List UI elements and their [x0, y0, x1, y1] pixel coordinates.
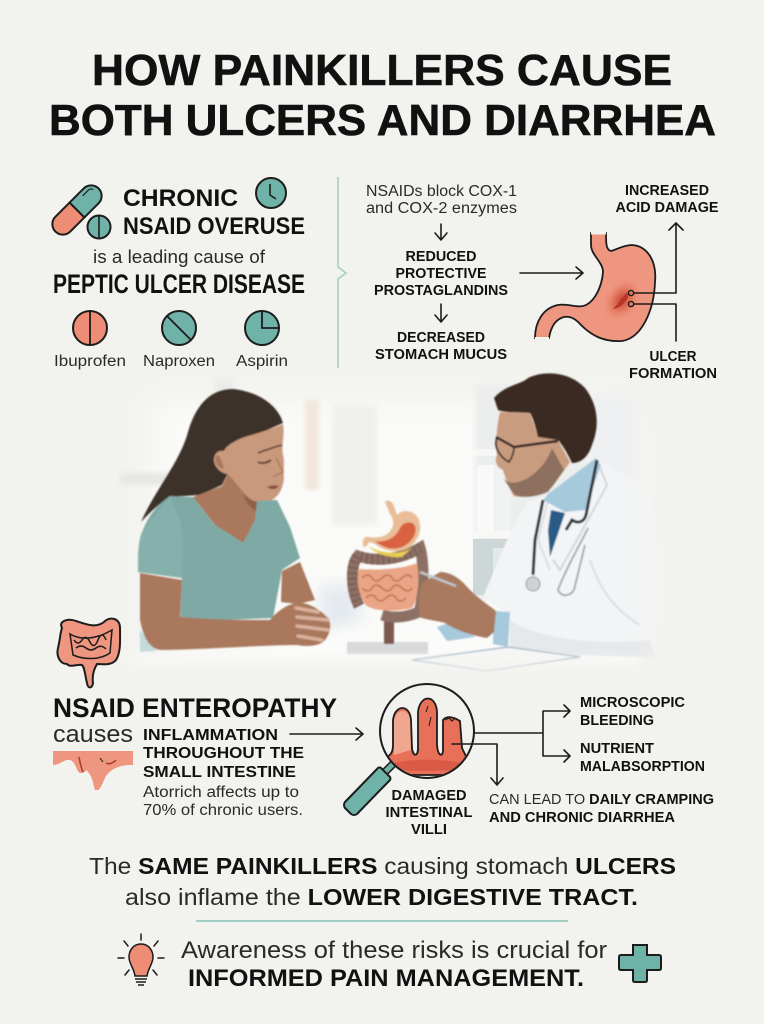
closing text: Awareness of these risks is crucial for	[181, 937, 607, 964]
connector: ulcer formation	[628, 301, 676, 341]
drug: naproxen	[143, 311, 215, 370]
text: inflammation throughout the small intestine: SMALL INTESTINE	[143, 764, 296, 781]
text: reduced protective prostaglandins	[374, 249, 508, 299]
table	[130, 620, 640, 672]
label: ulcer formation: FORMATION	[629, 366, 717, 382]
text: NSAIDs block enzymes: and COX-2 enzymes	[366, 200, 517, 217]
text: can lead to cramping and diarrhea: CAN LEAD TO DAILY CRAMPING	[489, 792, 714, 808]
label: microscopic bleeding	[580, 695, 686, 729]
text: causes: causes	[53, 721, 133, 748]
text: can lead to cramping and diarrhea	[489, 792, 714, 826]
summary text: The SAME PAINKILLERS causing stomach ULCERS	[89, 853, 676, 879]
icon: inflamed intestine lining	[53, 751, 133, 790]
patient	[138, 389, 330, 652]
label: microscopic bleeding: BLEEDING	[580, 713, 654, 729]
text: reduced protective prostaglandins: REDUCED	[406, 249, 476, 265]
closing text	[181, 937, 607, 992]
text: reduced protective prostaglandins: PROTECTIVE	[396, 266, 487, 282]
digestive system model	[347, 501, 428, 654]
heading: chronic NSAID overuse: CHRONIC	[123, 185, 238, 212]
divider bracket	[338, 177, 346, 368]
summary text	[89, 853, 676, 910]
text: can lead to cramping and diarrhea: AND CHRONIC DIARRHEA	[489, 810, 676, 826]
panel: chronic NSAID overuse	[48, 178, 305, 370]
heading: chronic NSAID overuse: NSAID OVERUSE	[123, 213, 305, 240]
divider	[196, 920, 568, 922]
heading: peptic ulcer disease: PEPTIC ULCER DISEASE	[53, 269, 305, 299]
drug: ibuprofen	[54, 311, 126, 370]
text: inflammation throughout the small intestine	[143, 727, 304, 781]
label: ulcer formation: ULCER	[650, 349, 697, 365]
arrow down	[435, 224, 447, 240]
arrow down	[435, 304, 447, 322]
drug: aspirin	[236, 311, 288, 370]
text: decreased stomach mucus: DECREASED	[397, 330, 485, 346]
label: ulcer formation	[629, 349, 717, 382]
label: damaged intestinal villi: INTESTINAL	[386, 805, 473, 821]
text: decreased stomach mucus: STOMACH MUCUS	[375, 347, 507, 363]
panel: NSAID enteropathy	[53, 619, 714, 838]
doctor	[412, 373, 664, 671]
label: nutrient malabsorption	[580, 741, 705, 775]
icon: small tablet	[88, 216, 110, 238]
icon: intestines	[57, 619, 120, 688]
text: leading cause: is a leading cause of	[93, 247, 266, 267]
connector: arrow down	[452, 744, 503, 785]
panel: mechanism flow	[366, 183, 719, 382]
title	[49, 46, 716, 145]
title: HOW PAINKILLERS CAUSE	[92, 46, 672, 95]
drug: ibuprofen: Ibuprofen	[54, 353, 126, 370]
label: nutrient malabsorption: MALABSORPTION	[580, 759, 705, 775]
icon: stomach	[535, 233, 655, 341]
text: NSAIDs block enzymes	[366, 183, 517, 217]
text: prevalence: Atorrich affects up to	[143, 784, 299, 801]
arrow to magnifier	[290, 728, 363, 740]
text: prevalence: 70% of chronic users.	[143, 802, 303, 819]
label: microscopic bleeding: MICROSCOPIC	[580, 695, 686, 711]
summary text: also inflame the LOWER DIGESTIVE TRACT.	[125, 884, 638, 910]
label: increased acid damage: INCREASED	[625, 183, 709, 199]
icon: magnifier with villi	[344, 684, 475, 815]
icon: clock	[256, 178, 286, 208]
text: reduced protective prostaglandins: PROSTAGLANDINS	[374, 283, 508, 299]
label: increased acid damage	[616, 183, 719, 216]
photo: patient and doctor with digestive model	[100, 373, 690, 678]
label: damaged intestinal villi	[386, 788, 473, 838]
label: nutrient malabsorption: NUTRIENT	[580, 741, 654, 757]
icon: capsule	[48, 181, 106, 239]
photo edge fades	[100, 375, 690, 678]
title: BOTH ULCERS AND DIARRHEA	[49, 96, 716, 145]
heading: chronic NSAID overuse	[123, 185, 305, 240]
text: NSAIDs block enzymes: NSAIDs block COX-1	[366, 183, 517, 200]
label: damaged intestinal villi: DAMAGED	[392, 788, 466, 804]
heading: NSAID enteropathy: NSAID ENTEROPATHY	[53, 693, 337, 723]
drug: aspirin: Aspirin	[236, 353, 288, 370]
text: inflammation throughout the small intestine: INFLAMMATION	[143, 727, 278, 744]
icon: medical cross	[619, 945, 661, 982]
photo backdrop	[120, 378, 635, 640]
label: damaged intestinal villi: VILLI	[411, 822, 447, 838]
label: increased acid damage: ACID DAMAGE	[616, 200, 719, 216]
connector: increased acid damage	[628, 223, 683, 296]
icon: light bulb	[118, 934, 164, 985]
text: prevalence	[143, 784, 303, 819]
closing text: INFORMED PAIN MANAGEMENT.	[188, 965, 584, 992]
drug: naproxen: Naproxen	[143, 353, 215, 370]
text: decreased stomach mucus	[375, 330, 507, 363]
connector: branching arrows	[474, 705, 570, 762]
arrow to stomach	[520, 267, 583, 279]
text: inflammation throughout the small intestine: THROUGHOUT THE	[143, 745, 304, 762]
